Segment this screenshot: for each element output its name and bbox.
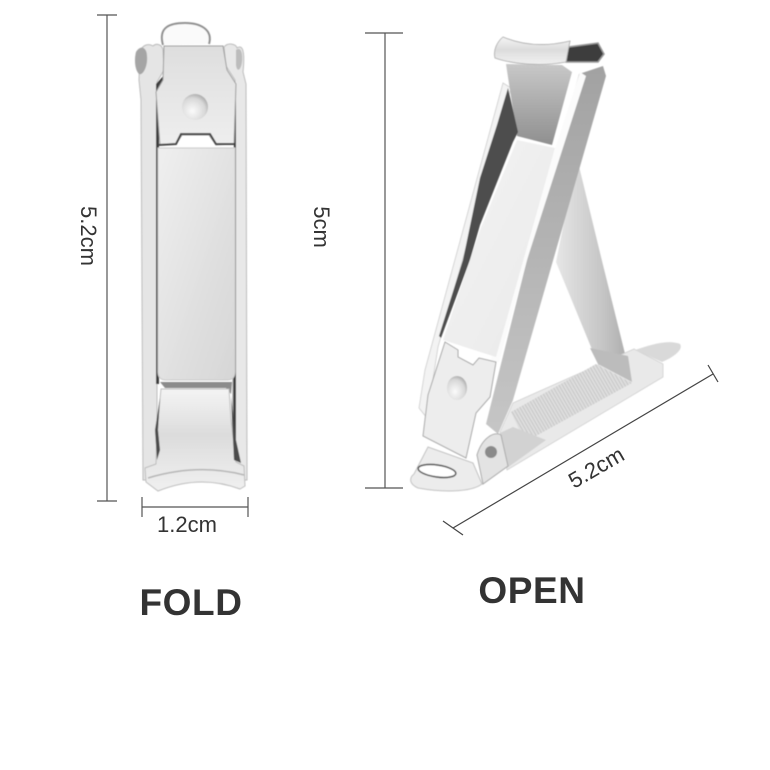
right side rail <box>224 44 247 480</box>
dimension: height fold 5.2cm: 5.2cm <box>76 206 101 266</box>
nail file base <box>500 349 663 470</box>
gray handle bar <box>486 66 606 434</box>
lever side shadows <box>155 396 241 463</box>
heading: OPEN: OPEN <box>478 570 586 611</box>
outer white rail <box>419 83 511 418</box>
icon: folding leg <box>556 158 632 382</box>
dimension: open height 5cm: 5cm <box>309 206 334 248</box>
icon: top ring <box>162 23 210 45</box>
white inner strip <box>490 72 586 362</box>
dimension: open length 5.2cm: 5.2cm <box>564 442 628 493</box>
dimension: width 1.2cm: 1.2cm <box>157 512 217 537</box>
dark inner shadow <box>439 88 518 338</box>
dark gaps <box>156 60 236 470</box>
lower plate <box>423 342 496 458</box>
left side rail <box>139 44 164 480</box>
heading: FOLD: FOLD <box>139 582 243 623</box>
ear pins <box>135 48 147 74</box>
dimension: open length 5.2cm <box>443 365 718 535</box>
brushed upper plate <box>158 148 235 380</box>
folded nail clipper <box>135 23 247 491</box>
plate ring foot <box>411 447 482 491</box>
dimension: height fold 5.2cm <box>76 15 117 501</box>
ring slot <box>417 462 457 480</box>
icon: open rivet <box>447 376 467 400</box>
dimension: open height 5cm <box>309 33 403 488</box>
notch shadow <box>158 134 235 145</box>
leg front edge over base <box>590 348 632 382</box>
lip edge <box>148 470 244 478</box>
white brushed plate <box>443 140 555 357</box>
file texture <box>511 364 632 442</box>
top plate <box>156 46 236 145</box>
curved lower lever <box>145 389 245 491</box>
hinge <box>477 434 508 484</box>
open nail clipper <box>411 37 681 491</box>
jaw opening <box>566 43 604 62</box>
curved head lip <box>494 37 570 64</box>
dimension: width 1.2cm <box>142 497 248 537</box>
base wedge shadow <box>500 427 546 468</box>
dark shadow under plate <box>160 382 232 394</box>
icon: rivet <box>182 94 208 120</box>
head triangle <box>506 64 572 145</box>
base tongue <box>635 342 681 362</box>
